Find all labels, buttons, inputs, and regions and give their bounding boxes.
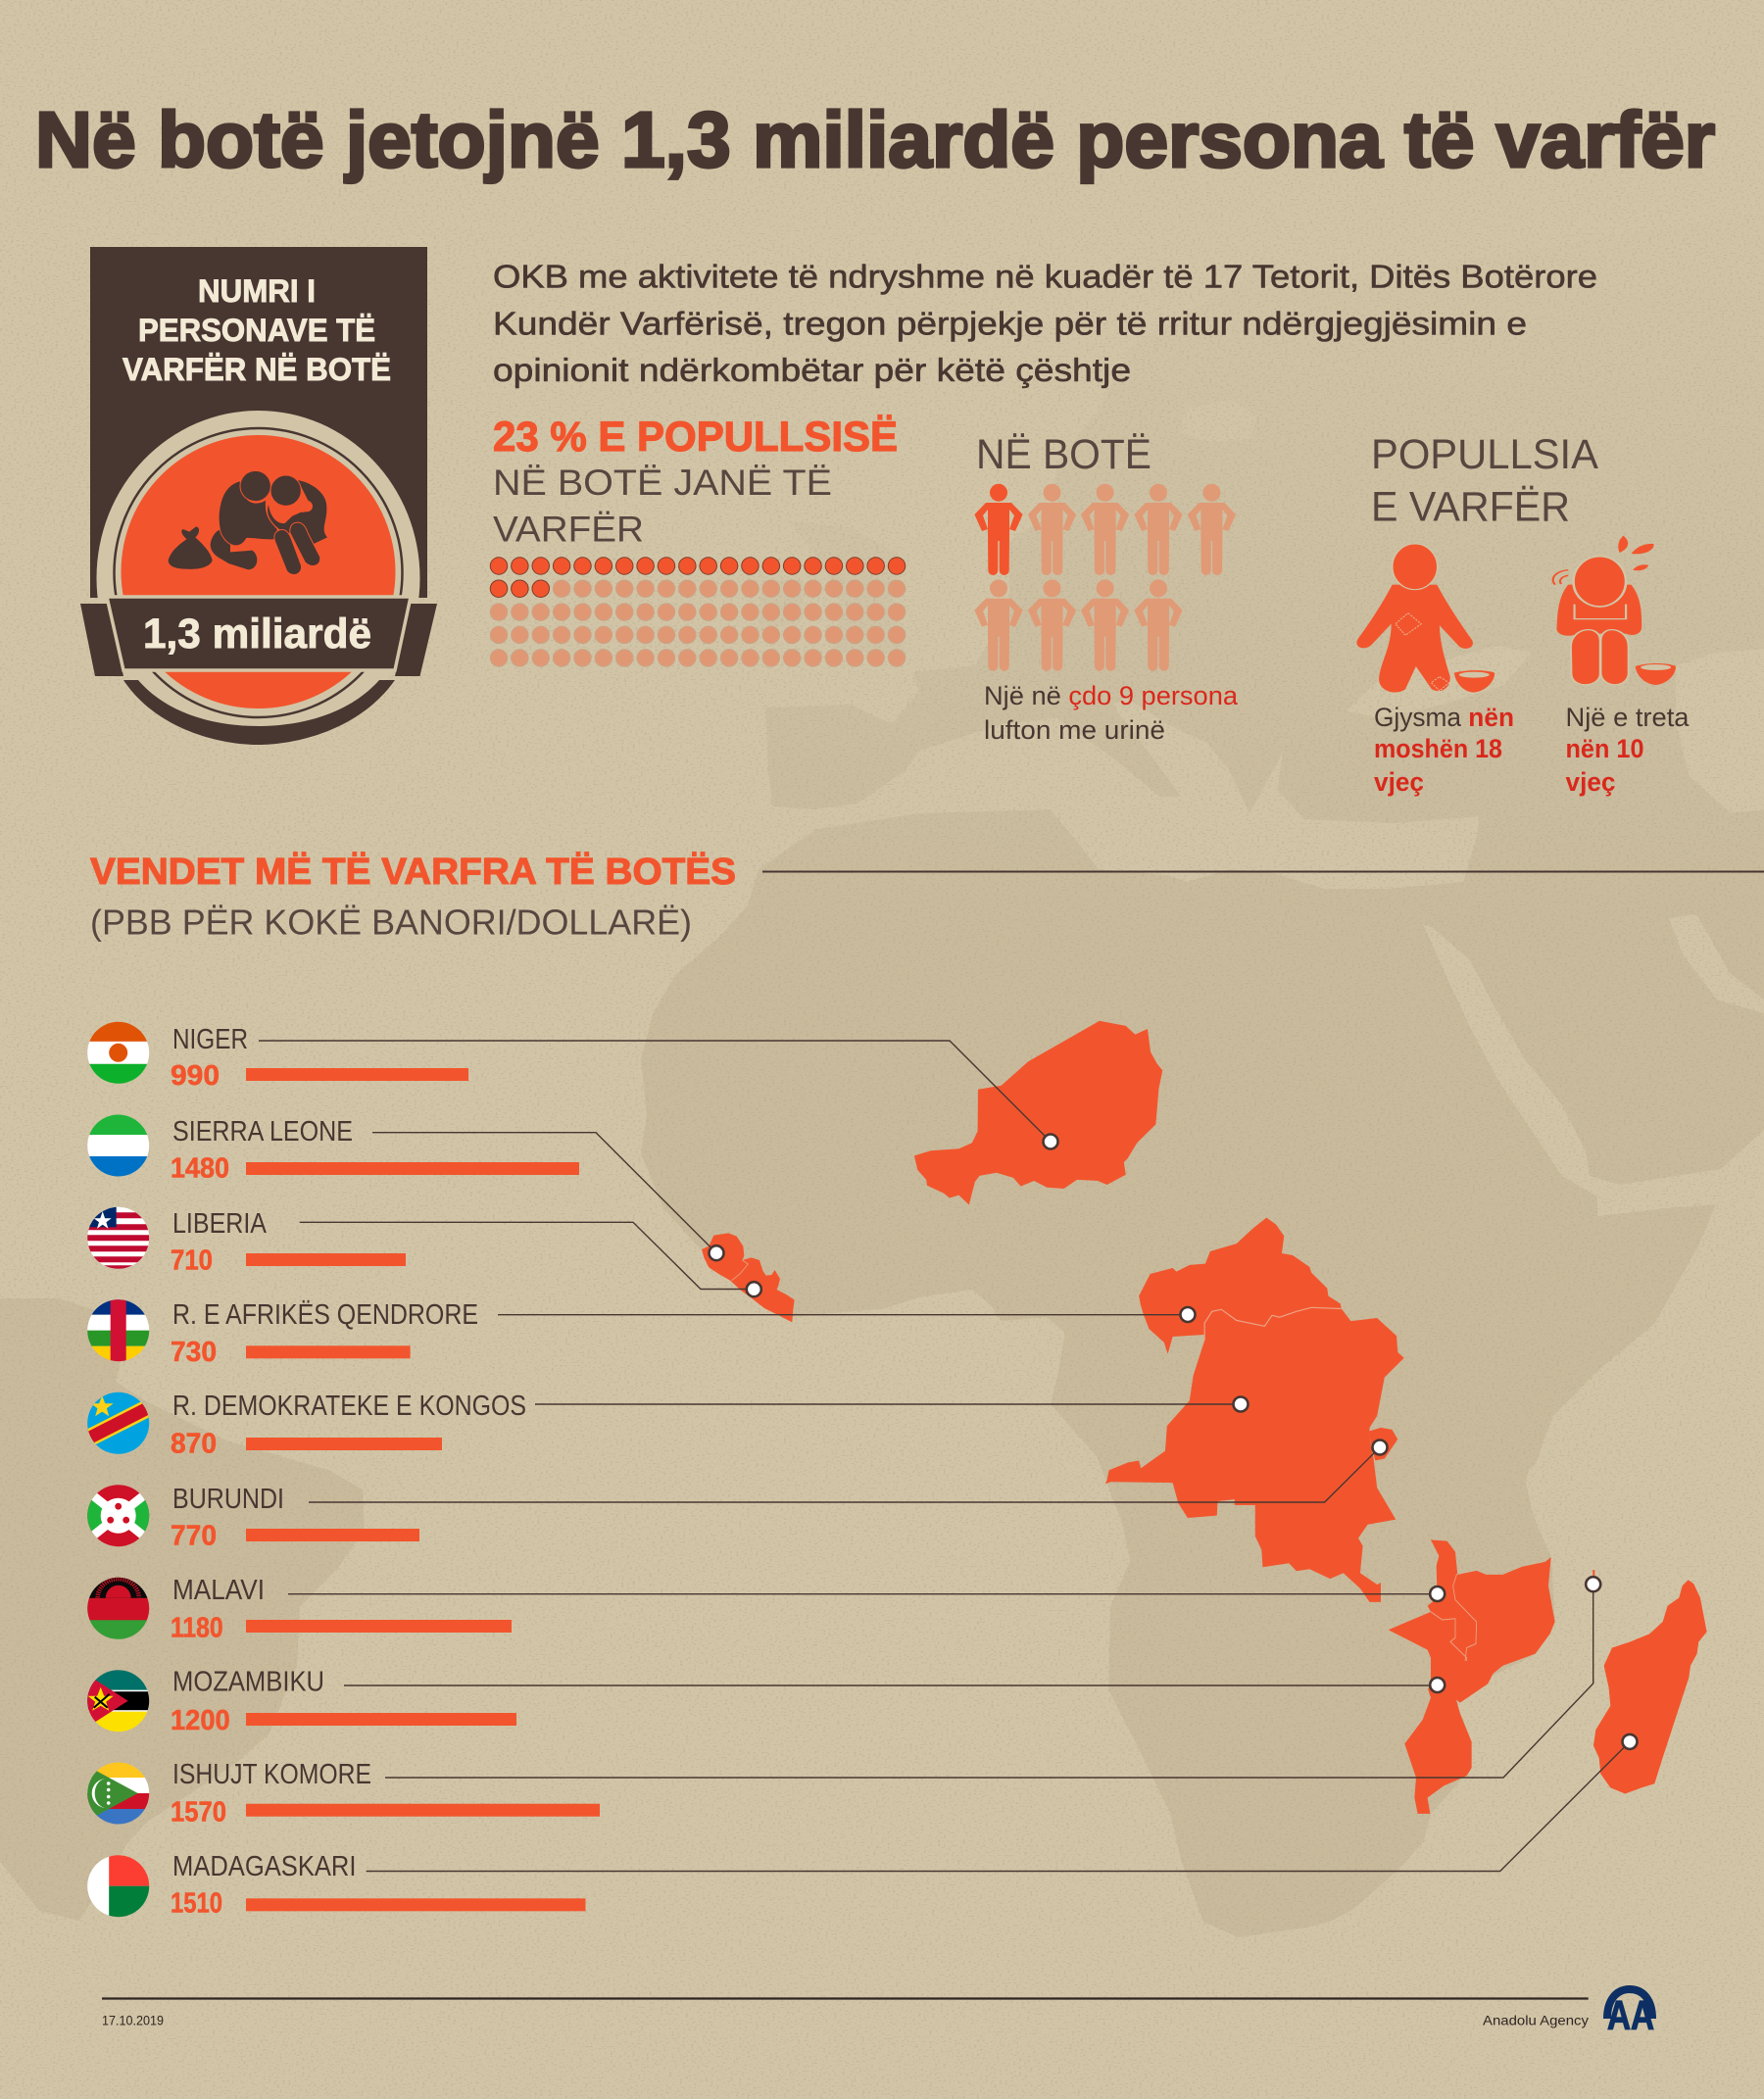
panel: one in nine <box>974 432 1239 745</box>
subheading: NË BOTË JANË TË <box>493 463 832 503</box>
dot chart: 23 of 100 <box>499 566 898 658</box>
subheading: VARFËR <box>493 510 644 549</box>
row: Mozambique: MOZAMBIKU <box>172 1667 324 1698</box>
caption: a third under 10: vjeç <box>1566 767 1615 797</box>
row: Central African Republic: 730 <box>171 1337 217 1368</box>
Niger shape <box>914 1021 1162 1205</box>
badge heading <box>122 273 391 387</box>
row: Liberia: 710 <box>171 1245 213 1276</box>
row: Sierra Leone: SIERRA LEONE <box>172 1116 353 1147</box>
heading: E VARFËR <box>1371 484 1570 531</box>
ribbon: 1,3 miliardë <box>143 610 371 658</box>
subheading <box>493 463 832 549</box>
row: Madagascar: 1510 <box>171 1888 222 1920</box>
flag: Malawi <box>87 1577 150 1639</box>
map point markers <box>710 1135 1637 1749</box>
heading: NË BOTË <box>976 432 1152 478</box>
flag: Madagascar <box>87 1855 150 1918</box>
icon: poor family with bag <box>169 470 327 574</box>
map: highlighted countries <box>702 1021 1707 1814</box>
Malawi and Mozambique shape <box>1389 1539 1707 1814</box>
row: Central African Republic: R. E AFRIKËS QENDRORE <box>172 1299 478 1331</box>
Sierra Leone and Liberia shape <box>702 1233 795 1322</box>
flag: Liberia <box>87 1206 150 1270</box>
row: Malawi: 1180 <box>171 1613 223 1644</box>
heading: POPULLSIA <box>1371 432 1599 478</box>
flag: Niger <box>87 1021 150 1085</box>
Comoros shape <box>1592 1570 1594 1579</box>
logo: Anadolu Agency: AA <box>1607 1992 1654 2038</box>
row: Niger: 990 <box>171 1060 220 1092</box>
flag: Mozambique <box>87 1670 150 1733</box>
caption: Një në çdo 9 persona <box>984 681 1239 710</box>
row: Malawi <box>87 1578 512 1639</box>
row: Mozambique: 1200 <box>171 1705 230 1736</box>
section heading: poorest countries <box>90 851 1764 943</box>
panel: 23 percent of population <box>493 414 898 658</box>
row: Burundi: 770 <box>171 1521 217 1552</box>
caption: half under 18 <box>1374 703 1514 797</box>
row: Sierra Leone <box>87 1114 579 1184</box>
title: Në botë jetojnë 1,3 miliardë persona të varfër <box>35 96 1715 183</box>
flag: Sierra Leone <box>87 1114 150 1177</box>
leader lines from labels to map points <box>259 1041 1630 1872</box>
flag: Central African Republic <box>87 1299 150 1362</box>
row: Madagascar: MADAGASKARI <box>172 1851 357 1882</box>
intro text block: Kundër Varfërisë, tregon përpjekje për të rritur ndërgjegjësimin e <box>493 306 1527 341</box>
badge heading: PERSONAVE TË <box>138 313 375 348</box>
row: Sierra Leone: 1480 <box>171 1152 229 1184</box>
panel: badge, number of poor people <box>80 247 437 746</box>
footer <box>102 1989 1654 2038</box>
row: Niger <box>87 1021 468 1092</box>
Madagascar shape <box>1593 1580 1707 1793</box>
row: Comoros: ISHUJT KOMORE <box>172 1759 371 1790</box>
heading: 23 % E POPULLSISË <box>493 414 898 461</box>
section heading: poorest countries: (PBB PËR KOKË BANORI/DOLLARË) <box>90 902 692 943</box>
medallion <box>96 411 419 746</box>
row: DR Congo: 870 <box>171 1428 217 1459</box>
row: Madagascar <box>87 1851 585 1920</box>
caption: half under 18: Gjysma nën <box>1374 703 1514 732</box>
flag: Burundi <box>85 1485 152 1547</box>
flag: DR Congo <box>87 1391 149 1454</box>
section heading: poorest countries: VENDET MË TË VARFRA TË BOTËS <box>90 851 736 893</box>
date: 17.10.2019 <box>102 2013 164 2028</box>
caption: a third under 10: nën 10 <box>1566 734 1644 763</box>
row: DR Congo: R. DEMOKRATEKE E KONGOS <box>172 1391 526 1422</box>
caption: half under 18: vjeç <box>1374 767 1424 797</box>
row: Burundi <box>85 1484 419 1552</box>
Burundi shape <box>1368 1428 1397 1461</box>
heading <box>1371 432 1599 531</box>
intro text block: opinionit ndërkombëtar për këtë çështje <box>493 352 1131 388</box>
row: Comoros <box>87 1759 600 1828</box>
row: Liberia: LIBERIA <box>172 1208 267 1240</box>
badge heading: VARFËR NË BOTË <box>122 352 391 387</box>
badge heading: NUMRI I <box>198 273 316 309</box>
badge background <box>90 247 427 598</box>
pictogram: 1 of 9 people <box>974 484 1236 671</box>
caption: a third under 10 <box>1566 703 1690 797</box>
Central African Republic and DR Congo shape <box>1105 1218 1404 1602</box>
row: Malawi: MALAVI <box>172 1575 265 1606</box>
caption: lufton me urinë <box>984 715 1165 745</box>
ribbon <box>80 597 437 676</box>
icon: sitting child with bowl <box>1356 544 1494 693</box>
row: Burundi: BURUNDI <box>172 1484 284 1515</box>
row: Mozambique <box>87 1670 516 1733</box>
row: Niger: NIGER <box>172 1024 248 1055</box>
caption: a third under 10: Një e treta <box>1566 703 1690 732</box>
agency name: Anadolu Agency <box>1483 2013 1589 2028</box>
flag: Comoros <box>87 1762 150 1825</box>
row: DR Congo <box>87 1391 525 1454</box>
caption: half under 18: moshën 18 <box>1374 734 1502 763</box>
intro text block: OKB me aktivitete të ndryshme në kuadër të 17 Tetorit, Ditës Botërore <box>493 259 1597 294</box>
icon: crouching child with bowl <box>1553 536 1676 685</box>
panel: poor population <box>1356 432 1690 797</box>
row: Comoros: 1570 <box>171 1796 226 1828</box>
caption <box>984 681 1239 745</box>
row: Liberia <box>87 1206 406 1276</box>
intro text block <box>493 259 1597 388</box>
row: Central African Republic <box>87 1299 478 1368</box>
